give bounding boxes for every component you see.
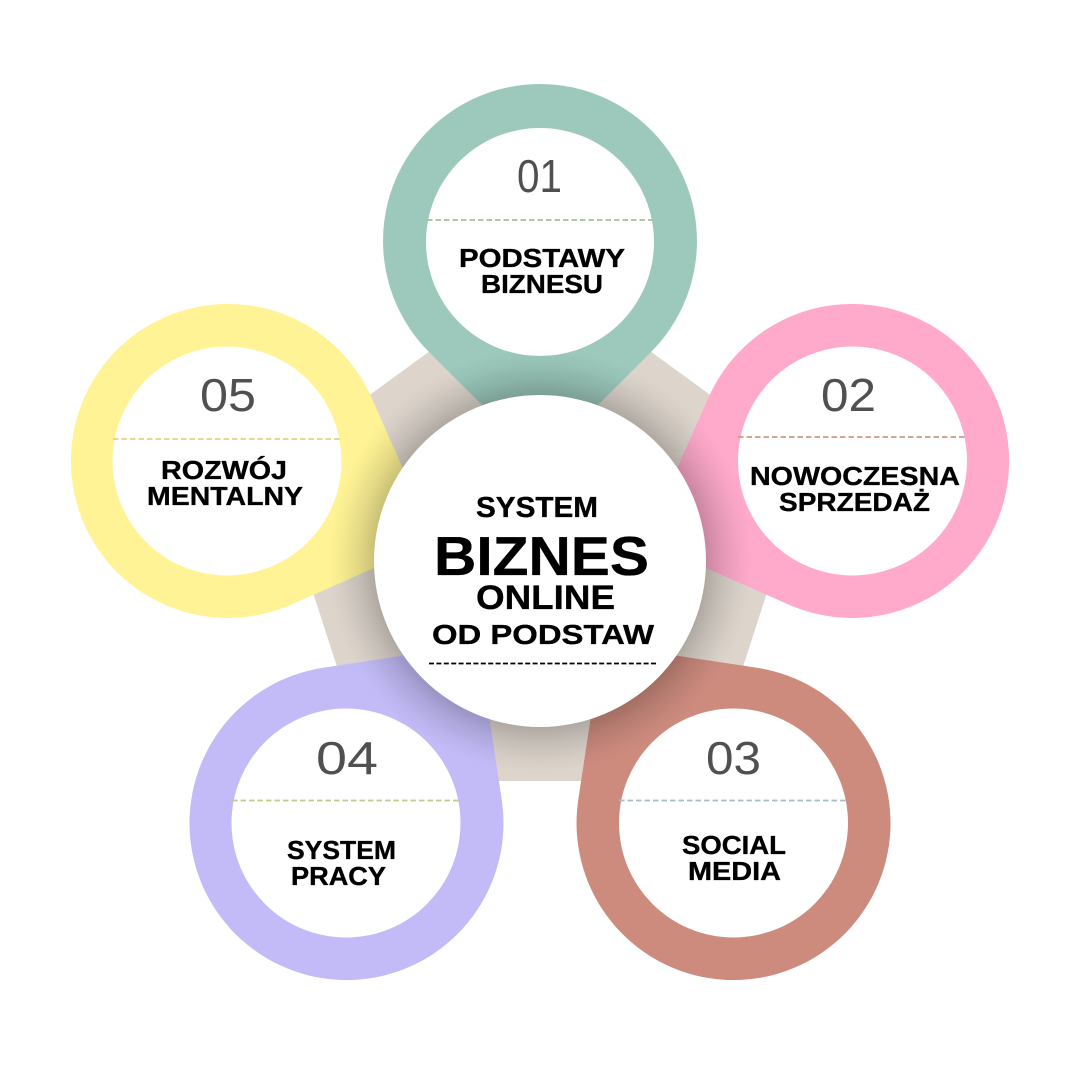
label 02: NOWOCZESNA <box>750 461 960 491</box>
label 04: SYSTEM <box>287 835 396 865</box>
label 04: PRACY <box>291 861 386 891</box>
teardrop 04 <box>189 644 503 980</box>
label 01 <box>459 243 625 299</box>
center dashed divider <box>429 662 658 664</box>
teardrop 01 <box>383 84 697 463</box>
title: online: ONLINE <box>476 579 615 617</box>
pentagon backdrop <box>272 271 808 781</box>
number 01: 01 <box>517 150 562 202</box>
divider 01 <box>427 219 653 221</box>
label 05: MENTALNY <box>147 481 303 511</box>
teardrop 02 <box>645 304 1009 618</box>
inner circle 05 <box>112 346 342 576</box>
title: system: SYSTEM <box>476 492 598 524</box>
number 04: 04 <box>316 732 378 784</box>
divider 03 <box>619 800 848 802</box>
panel: center title <box>374 395 706 727</box>
panel: 03 social media <box>577 644 891 980</box>
inner circle 01 <box>426 128 654 356</box>
teardrop 03 <box>577 644 891 980</box>
panel: 04 system pracy <box>189 644 503 980</box>
panel: 01 podstawy biznesu <box>383 84 697 463</box>
label 04 <box>287 835 396 891</box>
number 05: 05 <box>200 369 256 421</box>
label 01: BIZNESU <box>481 269 603 299</box>
label 03: MEDIA <box>688 856 781 886</box>
title: od podstaw: OD PODSTAW <box>432 619 655 650</box>
divider 02 <box>738 436 967 438</box>
label 02 <box>750 461 960 517</box>
inner circle 04 <box>232 708 460 938</box>
divider 04 <box>232 800 460 802</box>
inner circle 03 <box>619 708 848 938</box>
label 05 <box>147 455 303 511</box>
teardrop 05 <box>71 304 435 618</box>
panel: 02 nowoczesna sprzedaz <box>645 304 1009 618</box>
center circle <box>374 395 706 727</box>
panel: 05 rozwoj mentalny <box>71 304 435 618</box>
label 01: PODSTAWY <box>459 243 625 273</box>
label 02: SPRZEDAŻ <box>779 487 930 517</box>
inner circle 02 <box>738 346 967 576</box>
label 05: ROZWÓJ <box>161 455 287 485</box>
divider 05 <box>113 438 341 440</box>
center circle shadow <box>328 349 752 773</box>
label 03: SOCIAL <box>682 830 786 860</box>
label 03 <box>682 830 786 886</box>
number 02: 02 <box>821 369 876 421</box>
number 03: 03 <box>706 732 761 784</box>
title: biznes: BIZNES <box>434 525 649 587</box>
